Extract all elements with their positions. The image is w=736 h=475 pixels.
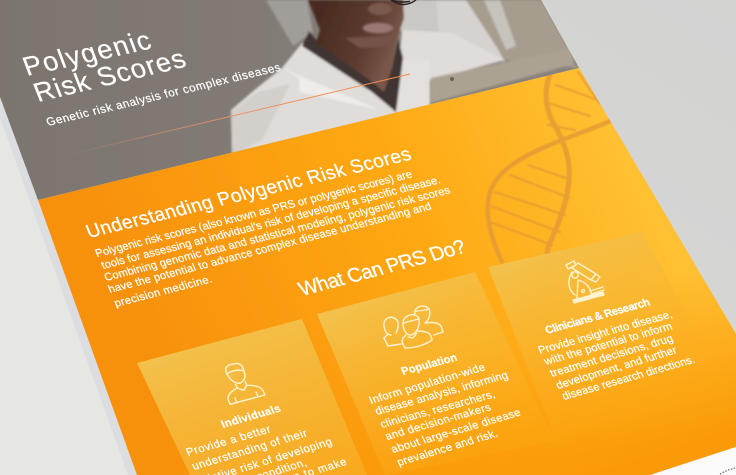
card text: with the potential to inform — [541, 321, 674, 368]
title: Polygenic — [18, 25, 155, 82]
card label: Individuals — [219, 403, 283, 431]
intro paragraph: tools for assessing an individual's risk of developing a specific disease. — [100, 174, 442, 272]
icon: group of people — [384, 306, 443, 348]
card text: Provide insight into disease, — [536, 309, 674, 357]
card text — [536, 309, 697, 403]
panel: population — [317, 272, 526, 468]
accent line — [67, 74, 410, 155]
card text — [367, 362, 523, 469]
desk area left of the page — [0, 105, 137, 475]
subtitle: Genetic risk analysis for complex diseases — [45, 62, 283, 129]
icon: microscope — [566, 261, 604, 303]
nose shading — [368, 3, 392, 15]
intro paragraph: Combining genomic data and statistical modeling, polygenic risk scores — [103, 185, 453, 284]
lab coat — [231, 30, 505, 160]
card text: clinicians, researchers, — [378, 389, 497, 431]
intro paragraph: have the potential to advance complex disease understanding and — [107, 201, 433, 296]
card label: Clinicians & Research — [543, 297, 652, 337]
card text: development, and further — [554, 345, 679, 392]
intro paragraph: precision medicine. — [113, 274, 214, 310]
panel: individuals — [137, 319, 367, 475]
page edge strip — [0, 95, 146, 475]
card background — [317, 272, 526, 466]
icon: person — [224, 362, 266, 405]
card label: Population — [399, 352, 459, 378]
card background — [137, 319, 367, 475]
card text: disease research directions. — [560, 354, 697, 403]
card text: about large-scale disease — [389, 407, 523, 456]
footer logo specks — [720, 468, 735, 474]
intro paragraph — [94, 169, 453, 310]
icon: DNA helix — [488, 72, 610, 272]
card text: understanding of their — [190, 428, 310, 473]
intro paragraph: Polygenic risk scores (also known as PRS or polygenic scores) are — [94, 169, 414, 260]
card text: disease analysis, informing — [373, 370, 510, 418]
white paper corner — [650, 447, 736, 475]
panel: clinicians and research — [488, 232, 695, 400]
card text: treatment decisions, drug — [548, 333, 675, 380]
card text: Inform population-wide — [367, 362, 487, 407]
heading: understanding: Understanding Polygenic Risk Scores — [83, 144, 414, 243]
neck and face — [308, 0, 404, 92]
lips — [363, 23, 393, 33]
card background — [488, 232, 657, 398]
card text: prevalence and risk. — [395, 428, 500, 469]
card text — [184, 424, 349, 475]
photo banner — [0, 0, 600, 210]
card text: and decision-makers — [383, 402, 493, 443]
dark shirt — [302, 31, 403, 112]
title: Risk Scores — [29, 43, 190, 108]
heading: what can PRS do: What Can PRS Do? — [295, 236, 469, 301]
laptop — [431, 48, 574, 103]
card text: Provide a better — [184, 424, 273, 459]
glasses — [391, 0, 416, 4]
